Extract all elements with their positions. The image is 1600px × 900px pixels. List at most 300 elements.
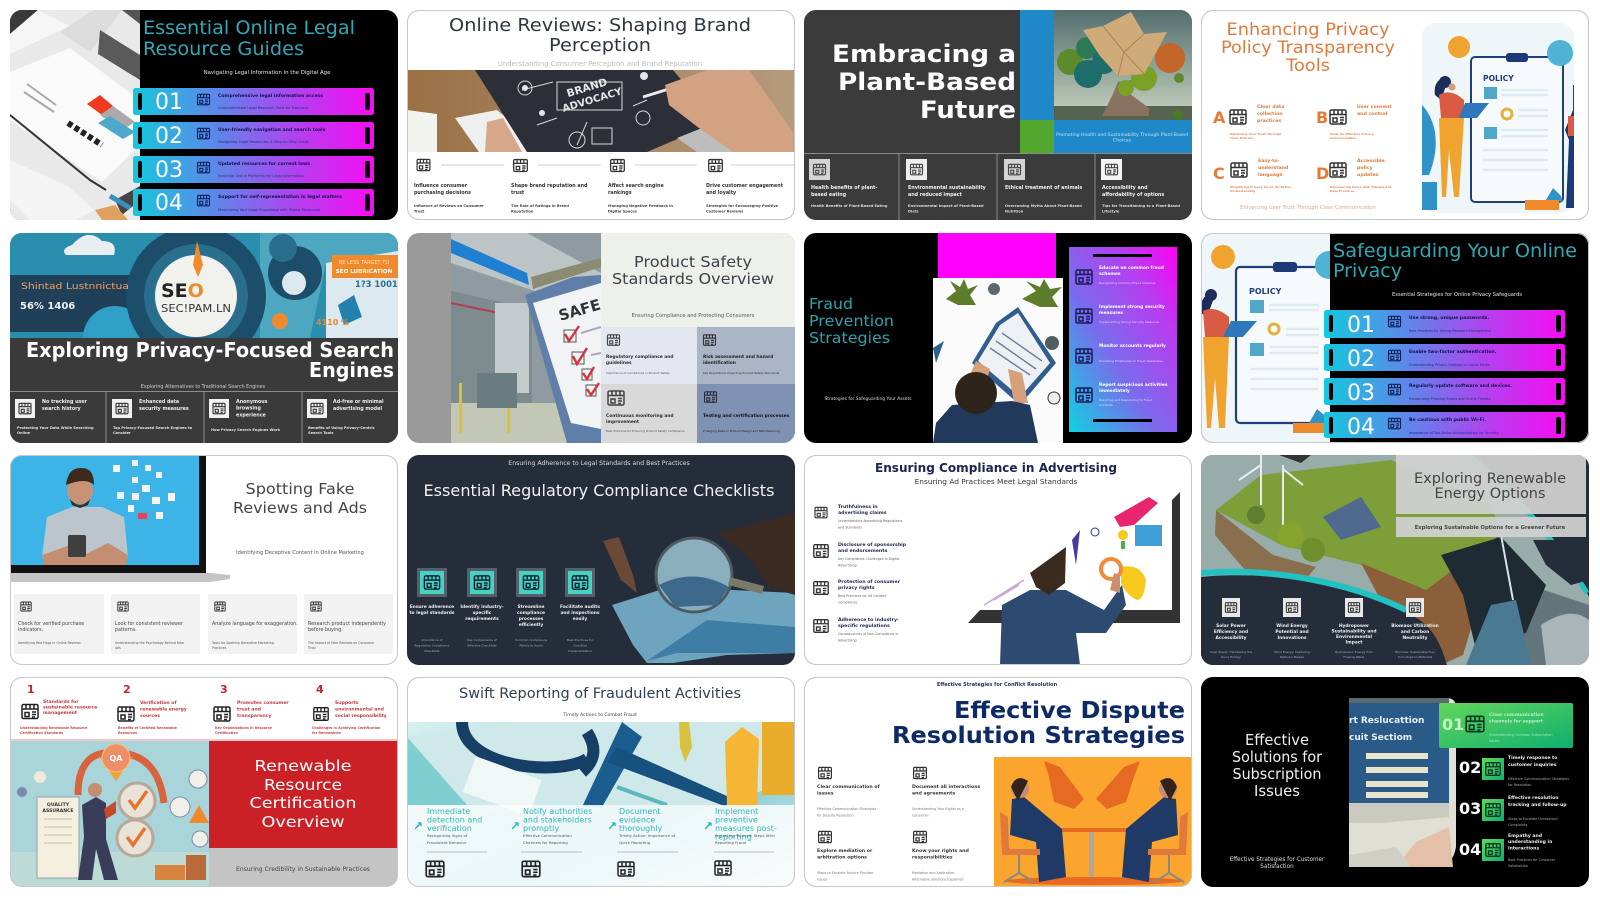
title line 2: Prevention: [809, 312, 894, 330]
photo: subscription dashboard: rt Reslucattion: [1349, 716, 1424, 726]
step 3: efficiently: [519, 622, 543, 628]
panel: Swift Reporting of Fraudulent Activities: [407, 677, 795, 887]
item 01: Comprehensive Legal Research Tools for Everyone: [218, 106, 309, 110]
item 02: Navigating Legal Resources: A Step-by-Step Guide: [218, 140, 309, 144]
item 3: Compliance: [838, 601, 857, 605]
subtitle: Identifying Deceptive Content in Online Marketing: [236, 550, 364, 556]
panel: Ensuring Compliance in Advertising: [804, 455, 1192, 665]
item 02: customer inquiries: [1508, 762, 1557, 768]
step 3: Common Compliance: [515, 638, 547, 642]
box 2: Understanding the Psychology Behind Fake: [115, 641, 184, 645]
title line 2: Resolution Strategies: [892, 723, 1185, 749]
footer block: [209, 848, 398, 887]
title band: [10, 338, 398, 443]
quadrant 1: guidelines: [606, 360, 632, 366]
black content block: [1330, 233, 1589, 443]
item 3: [608, 160, 697, 213]
item 2: Resources: [118, 731, 137, 735]
image: SEO infographic: 4110 %: [316, 318, 349, 327]
image: SEO infographic: SEC!PAM.LN: [161, 302, 231, 315]
item 2: trust: [511, 190, 525, 196]
step 2: requirements: [465, 616, 499, 622]
item 4: Supports: [335, 700, 359, 706]
item 4: Incidents: [1099, 403, 1113, 407]
title: Product Safety: [634, 253, 752, 271]
item 04: [1459, 833, 1556, 868]
item 2: Top Privacy-Focused Search Engines to: [113, 426, 193, 430]
item 1: management: [43, 710, 78, 716]
item 1: Recognizing Signs of: [427, 833, 468, 838]
item 4: reporting: [715, 832, 752, 842]
item 2: and stakeholders: [523, 816, 592, 824]
title line 4: Issues: [1254, 782, 1300, 800]
item 02: 02: [1459, 758, 1481, 777]
image: SEO infographic: SEO: [161, 280, 204, 302]
illustration: policy board: [1201, 233, 1343, 443]
panel: Online Reviews: [407, 10, 795, 220]
item 03: [1324, 378, 1565, 406]
photo: subscription dashboard: cuit Sectiom: [1349, 733, 1412, 743]
item 2: Benefits of Certified Renewable: [118, 726, 178, 730]
item 01: [1324, 310, 1565, 338]
step 2: Key Components of: [467, 638, 498, 642]
item A: collection: [1257, 111, 1283, 117]
item B: B: [1316, 108, 1328, 127]
item 01: channels for support: [1489, 719, 1544, 725]
item 02: User-friendly navigation and search tools: [218, 127, 326, 133]
item 1: Recognizing Common Fraud Schemes: [1099, 281, 1156, 285]
title line 3: Strategies: [809, 329, 890, 347]
photo: tablet with brand advocacy: [407, 70, 795, 152]
item 2: Implementing Strong Security Measures: [1099, 320, 1160, 324]
step 2: [460, 568, 504, 648]
item 2: security measures: [139, 406, 189, 412]
item 01: 01: [1442, 715, 1464, 734]
header block: [601, 233, 795, 327]
box 2: Look for consistent reviewer: [115, 621, 183, 627]
item D: updates: [1357, 172, 1379, 178]
item 4: measures post-: [715, 824, 777, 833]
step 1: Regulatory Compliance: [415, 644, 450, 648]
item 3: [814, 579, 901, 605]
title line 2: Perception: [549, 35, 651, 56]
step 3: compliance: [517, 610, 545, 616]
box 1: [14, 594, 104, 654]
item 2: sources: [140, 713, 160, 719]
item 4: ↗: [703, 819, 713, 833]
panel: Effective Solutions for Subscription Issues: [1201, 677, 1589, 887]
step 4: Checklist: [573, 644, 588, 648]
item 2: Shape brand reputation and: [511, 183, 588, 189]
panel: Spotting Fake Reviews and Ads: [10, 455, 398, 665]
item C: C: [1213, 164, 1225, 183]
item 3: Steps to Escalate Service Provider: [817, 871, 874, 875]
image: SEO infographic: Shintad Lustnnictua: [21, 281, 129, 292]
caption: Choices: [1113, 138, 1132, 144]
item 04: Support for self-representation in legal matters: [218, 194, 342, 200]
item C: understand: [1258, 165, 1288, 171]
item 4: Challenges in Achieving Certification: [312, 726, 381, 730]
item 2: [118, 683, 187, 735]
item 02: Effective Communication Strategies: [1508, 777, 1569, 781]
item 2: Understanding Your Rights as a: [912, 807, 964, 811]
item 1: Clear communication of: [817, 784, 881, 790]
item 2: [1076, 304, 1165, 324]
photo: man on laptop screen: [10, 455, 230, 582]
item 1: Effective Communication Strategies: [817, 807, 877, 811]
photo: tablet with brand advocacy: ADVOCACY: [561, 86, 624, 115]
step 3: Pitfalls to Avoid: [519, 644, 543, 648]
item 3: Explore mediation or: [817, 848, 873, 854]
image: SEO infographic: 56% 1406: [20, 301, 75, 312]
item 3: experience: [236, 412, 267, 418]
item 01: Issues: [1489, 739, 1500, 743]
subtitle: Understanding Consumer Perception and Brand Reputation: [498, 60, 702, 68]
box 3: Practices: [212, 646, 227, 650]
item 4: social responsibility: [335, 713, 387, 719]
item D: D: [1316, 164, 1329, 183]
item 4: Lifestyle: [1102, 209, 1120, 213]
panel: Exploring Renewable Energy Options: [1201, 455, 1589, 665]
subtitle: Ensuring Compliance and Protecting Consumers: [632, 313, 755, 319]
step 3: Streamline: [517, 604, 545, 610]
item 3: Promotes consumer: [237, 700, 289, 706]
item 03: Effective resolution: [1508, 795, 1558, 801]
item 1: Health Benefits of Plant-Based Eating: [811, 204, 888, 208]
item 1: issues: [817, 790, 834, 796]
item C: language: [1258, 172, 1282, 178]
illustration: policy board: [1422, 23, 1574, 213]
item 3: Hydropower: Energy from: [1335, 650, 1373, 654]
item 4: [706, 160, 795, 213]
item 4: Protecting Yourself: Steps After: [715, 833, 775, 838]
step 1: to legal standards: [409, 610, 455, 616]
item 03: Updated resources for current laws: [218, 161, 310, 167]
item B: User consent: [1357, 104, 1392, 110]
image: SEO infographic: SEO LUBRICATION: [336, 269, 393, 275]
item 3: [209, 399, 281, 432]
item 1: sustainable resource: [43, 705, 97, 711]
item 01: Best Practices for Strong Password Management: [1409, 329, 1492, 333]
item 03: tracking and follow-up: [1508, 802, 1567, 808]
title: Enhancing Privacy: [1226, 20, 1390, 40]
photo: man signing documents: [933, 278, 1063, 443]
item 2: measures: [1099, 310, 1123, 316]
step 3: processes: [519, 616, 544, 622]
item 3: Flowing Water: [1343, 655, 1365, 659]
title line 3: Certification: [250, 794, 356, 812]
item D: Accessible: [1357, 158, 1385, 164]
item 4: [912, 831, 969, 882]
item C: Understanding: [1230, 189, 1255, 193]
item 3: ↗: [607, 819, 617, 833]
step 1: Checklists: [424, 649, 440, 653]
item 1: purchasing decisions: [414, 190, 471, 196]
item 4: and Carbon: [1401, 629, 1429, 635]
quadrant 2: Key Regulations Impacting Product Safety Standards: [703, 371, 780, 375]
title line 2: Plant-Based: [838, 68, 1016, 96]
item 1: Solar Power: [1216, 623, 1247, 629]
gradient panel: [1069, 247, 1177, 432]
step 4: [560, 568, 600, 653]
item 1: Efficiency and: [1214, 629, 1248, 635]
panel: Fraud Prevention Strategies: [804, 233, 1192, 443]
step 1: Ensure adherence: [410, 604, 454, 610]
title line 2: Reviews and Ads: [233, 499, 367, 517]
item 1: Certification Standards: [20, 731, 63, 735]
item 3: Educating Employees on Fraud Awareness: [1099, 359, 1163, 363]
title: Effective: [1245, 731, 1309, 749]
item 4: [307, 399, 384, 435]
item 1: Immediate: [427, 807, 470, 816]
item 02: [1324, 344, 1565, 372]
item 3: Ethical treatment of animals: [1005, 185, 1082, 191]
item 1: for Dispute Resolution: [817, 814, 854, 818]
title line 2: Resource: [264, 776, 342, 794]
item 3: Protection of consumer: [838, 579, 901, 585]
box 1: Identifying Red Flags in Online Reviews: [18, 641, 81, 645]
item 3: Quick Reporting: [619, 840, 651, 845]
item 4: and loyalty: [706, 190, 737, 196]
item 04: Best Practices for Customer: [1508, 858, 1556, 862]
item 2: [906, 159, 987, 213]
item A: [1213, 104, 1284, 140]
footer: Enhancing User Trust Through Clear Communication: [1240, 205, 1376, 211]
item 3: [1004, 159, 1082, 213]
title block: [209, 741, 398, 848]
step 1: [409, 568, 455, 653]
box 2: patterns.: [115, 627, 137, 633]
item 4: responsibilities: [912, 854, 953, 860]
item 03: Essential Online Platforms for Legal Information: [218, 174, 304, 178]
item 03: 03: [1459, 799, 1481, 818]
subtitle: Navigating Legal Information in the Digital Age: [204, 70, 331, 76]
item 04: Be cautious with public Wi-Fi.: [1409, 417, 1486, 423]
item 1: Educate on common fraud: [1099, 265, 1164, 271]
item 2: 2: [123, 683, 131, 696]
title block: Exploring Renewable: [1414, 471, 1566, 487]
title: Fraud: [809, 295, 853, 313]
title line 2: Standards Overview: [612, 270, 774, 288]
subtitle: Effective Strategies for Customer: [1230, 857, 1325, 863]
illustration: negotiation meeting: [994, 757, 1192, 887]
item 4: from Organic Materials: [1398, 655, 1433, 659]
title line 2: Solutions for: [1232, 748, 1323, 766]
panel: Essential Online Legal Resource Guides: [10, 10, 398, 220]
step 4: Best Practices for: [567, 638, 594, 642]
photo: factory clipboard: SAFE: [557, 296, 603, 325]
quadrant 2: [697, 327, 795, 384]
item 2: Enhanced data: [139, 399, 179, 405]
step 2: specific: [473, 610, 492, 616]
subtitle: Timely Actions to Combat Fraud: [562, 712, 637, 718]
item 4: Implement: [715, 807, 758, 816]
item 4: Know your rights and: [912, 848, 969, 854]
box 4: before buying.: [308, 627, 343, 633]
box 2: Ads: [115, 646, 121, 650]
item 4: Report suspicious activities: [1099, 382, 1168, 388]
item 01: [133, 88, 374, 115]
item 1: Online: [17, 431, 31, 435]
item 2: promptly: [523, 824, 559, 833]
box 4: The Impact of Fake Reviews on Consumer: [307, 641, 375, 645]
item 2: Notify authorities: [523, 807, 592, 816]
image: SEO infographic: [10, 226, 404, 370]
step 2: Identify industry-: [460, 604, 504, 610]
item 1: Fraudulent Behavior: [427, 840, 467, 845]
item 03: Steps to Escalate Unresolved: [1508, 817, 1557, 821]
quadrant 1: [601, 327, 697, 384]
item 4: Advertising: [838, 639, 857, 643]
box 1: Check for verified purchase: [18, 621, 84, 627]
photo: subscription dashboard: [1349, 698, 1456, 867]
item 02: 02: [155, 124, 183, 149]
colour block: [938, 233, 1056, 278]
item 2: Diets: [908, 209, 919, 213]
quadrant 3: Best Practices for Ensuring Product Safety Compliance: [606, 429, 685, 433]
item 3: privacy rights: [838, 585, 875, 591]
item 3: [607, 807, 678, 876]
item 1: detection and: [427, 816, 482, 824]
item C: Easy-to-: [1258, 158, 1280, 164]
title line 2: Engines: [309, 358, 394, 382]
item 04: Empathy and: [1508, 833, 1542, 839]
item 1: Influence consumer: [414, 183, 468, 189]
item 1: Standards for: [43, 699, 79, 705]
item 04: Maximizing Your Legal Knowledge with Digital Resources: [218, 208, 320, 212]
illustration: documents and charts: [407, 722, 795, 887]
quadrant 2: identification: [703, 360, 736, 366]
item 03: Complaints: [1508, 823, 1527, 827]
title: Renewable: [254, 757, 352, 775]
subtitle: Essential Strategies for Online Privacy Safeguards: [1392, 292, 1522, 298]
item 03: 03: [155, 158, 183, 183]
item 02: 02: [1347, 347, 1375, 372]
item 03: Recognizing Phishing Scams and Online Threats: [1409, 397, 1491, 401]
title block: Exploring Sustainable Options for a Greener Future: [1415, 525, 1566, 531]
title: Safeguarding Your Online: [1333, 240, 1577, 262]
item 2: Nature's Breeze: [1280, 655, 1304, 659]
item 2: Wind Energy: [1276, 623, 1308, 629]
illustration: man at whiteboard: [968, 492, 1180, 665]
item 3: Document: [619, 807, 660, 816]
item 4: Reporting and Responding to Fraud: [1099, 398, 1152, 402]
item 01: Use strong, unique passwords.: [1409, 315, 1489, 321]
item 4: Tips for Transitioning to a Plant-Based: [1102, 204, 1180, 208]
title: Embracing a: [832, 40, 1016, 68]
item 3: Digital Spaces: [608, 209, 637, 213]
item B: [1316, 104, 1392, 140]
box 1: indicators.: [18, 627, 43, 633]
item 01: Comprehensive legal information access: [218, 93, 323, 99]
item 4: Adherence to industry-: [838, 617, 899, 623]
item 3: 3: [220, 683, 228, 696]
box 3: [208, 594, 298, 654]
title block: [1396, 455, 1586, 537]
illustration: quality assurance: QA: [110, 754, 123, 763]
step 3: [515, 568, 547, 648]
subtitle: Strategies for Safeguarding Your Assets: [824, 396, 912, 402]
item 2: [1274, 598, 1310, 659]
step 4: easily: [573, 616, 587, 622]
item 3: Hydropower: [1339, 623, 1370, 629]
item 1: advertising claims: [838, 510, 887, 516]
quadrant 1: Importance of Compliance in Product Safety: [606, 371, 670, 375]
title: Essential Online Legal: [143, 17, 355, 39]
item 1: [1076, 265, 1164, 285]
item 4: [1391, 598, 1439, 659]
step 4: and inspections: [560, 610, 600, 616]
item C: Simplifying Privacy Terms for Better: [1230, 185, 1292, 189]
item 04: [133, 189, 374, 216]
caption: Promoting Health and Sustainability Through Plant-Based: [1056, 132, 1188, 138]
item 4: Biomass: Sustainable Fuel: [1395, 650, 1435, 654]
quadrant 3: [601, 384, 697, 443]
item D: Empowering Users with Transparent: [1330, 185, 1392, 189]
subtitle: Exploring Alternatives to Traditional Search Engines: [141, 384, 266, 390]
item 1: Health benefits of plant-: [811, 185, 877, 191]
item 2: [510, 807, 592, 877]
item 2: [814, 542, 907, 568]
item 3: arbitration options: [817, 854, 867, 860]
illustration: quality assurance: [10, 741, 209, 887]
item 4: for Renewables: [312, 731, 341, 735]
item 1: Understanding Advertising Regulations: [838, 519, 903, 523]
item 3: How Privacy Search Engines Work: [211, 428, 281, 432]
panel: Plant-Based Future: [804, 10, 1192, 220]
item 1: No tracking user: [42, 399, 88, 405]
quadrant 4: Testing and certification processes: [703, 413, 790, 419]
item 3: transparency: [237, 713, 271, 719]
item B: Communication: [1330, 136, 1356, 140]
item 3: Certification: [215, 731, 239, 735]
quadrant 2: Risk assessment and hazard: [703, 354, 773, 360]
item 1: Sun's Energy: [1221, 655, 1241, 659]
footer block: Ensuring Credibility in Sustainable Practices: [236, 866, 370, 873]
item 2: Effective Communication: [523, 833, 572, 838]
item 1: Accessibility: [1216, 635, 1247, 641]
panel: Regulatory Compliance Checklists: [407, 455, 795, 665]
item 3: Issues: [817, 878, 828, 882]
item 2: Verification of: [140, 700, 177, 706]
item 2: Channels for Reporting: [523, 840, 568, 845]
item 2: ↗: [510, 819, 520, 833]
item 2: and endorsements: [838, 548, 888, 554]
item 4: [703, 807, 777, 875]
translucent overlay: [407, 805, 795, 887]
box 3: Tools for Spotting Deceptive Marketing: [211, 641, 274, 645]
item 04: interactions: [1508, 845, 1539, 851]
item 1: [414, 159, 504, 213]
item 3: rankings: [608, 190, 632, 196]
illustration: quality assurance: ASSURANCE: [42, 808, 74, 814]
item 1: and Standards: [838, 526, 862, 530]
item 02: Understanding Privacy Settings on Social Media: [1409, 363, 1490, 367]
item 04: 04: [1459, 840, 1481, 859]
item 04: understanding in: [1508, 839, 1552, 845]
item 4: Ad-free or minimal: [333, 399, 384, 405]
item 1: Trust: [414, 209, 425, 213]
item 03: Regularly update software and devices.: [1409, 383, 1512, 389]
item 4: immediately: [1099, 388, 1130, 394]
box 4: [304, 594, 393, 654]
item 2: Advertising: [838, 564, 857, 568]
item 4: environmental and: [335, 706, 384, 712]
item 3: Impact: [1345, 640, 1363, 646]
item 4: [1101, 159, 1180, 213]
photo: factory clipboard: [451, 233, 603, 443]
item 01: 01: [1347, 313, 1375, 338]
